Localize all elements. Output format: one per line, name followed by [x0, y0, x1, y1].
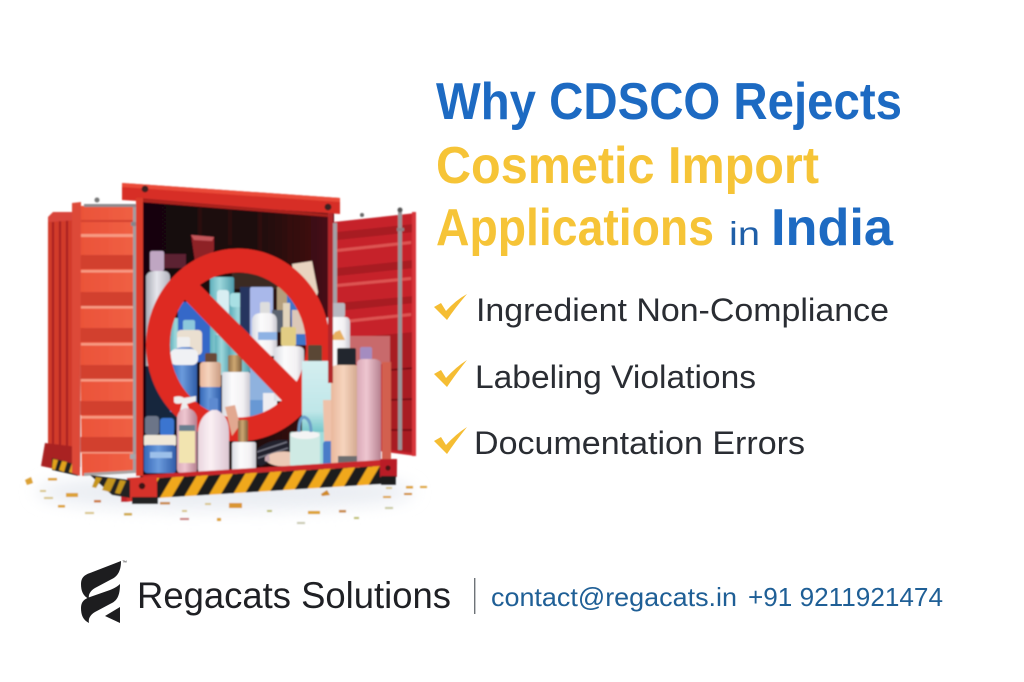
- contact phone: +91 9211921474: [748, 582, 943, 612]
- title line 3: Applications: [436, 199, 714, 257]
- item: ingredient non-compliance: Ingredient Non-Compliance: [476, 292, 889, 328]
- left open door: [72, 198, 139, 476]
- container base with hazard stripes: [90, 459, 397, 504]
- container interior: [140, 198, 334, 478]
- item: documentation errors: Documentation Errors: [474, 425, 805, 461]
- logo mark: ™: [122, 560, 127, 566]
- checklist: [434, 292, 889, 461]
- logo mark: [81, 560, 127, 623]
- title line 1: Why CDSCO Rejects: [436, 73, 902, 131]
- scattered debris on the floor: [25, 477, 427, 524]
- divider: [474, 578, 475, 614]
- floor shadow: [35, 474, 415, 510]
- back row bottles: [146, 235, 390, 375]
- title line 2: Cosmetic Import: [436, 137, 819, 195]
- title: [436, 73, 902, 257]
- middle row bottles: [170, 320, 304, 422]
- contact email: contact@regacats.in: [491, 582, 737, 612]
- title line 3: in: [729, 215, 760, 252]
- front row bottles: [144, 345, 391, 473]
- brand name: Regacats Solutions: [137, 575, 451, 616]
- right open door: [333, 208, 416, 456]
- title line 3: India: [771, 199, 894, 257]
- footer: [81, 560, 943, 623]
- illustration: red shipping container full of cosmetics with prohibition sign: [25, 183, 427, 524]
- left side wall of container: [41, 212, 78, 476]
- prohibition sign: [158, 260, 318, 430]
- container frame: top beam and door post: [122, 183, 340, 476]
- title line 3: [436, 199, 894, 257]
- item: labeling violations: Labeling Violations: [475, 359, 756, 395]
